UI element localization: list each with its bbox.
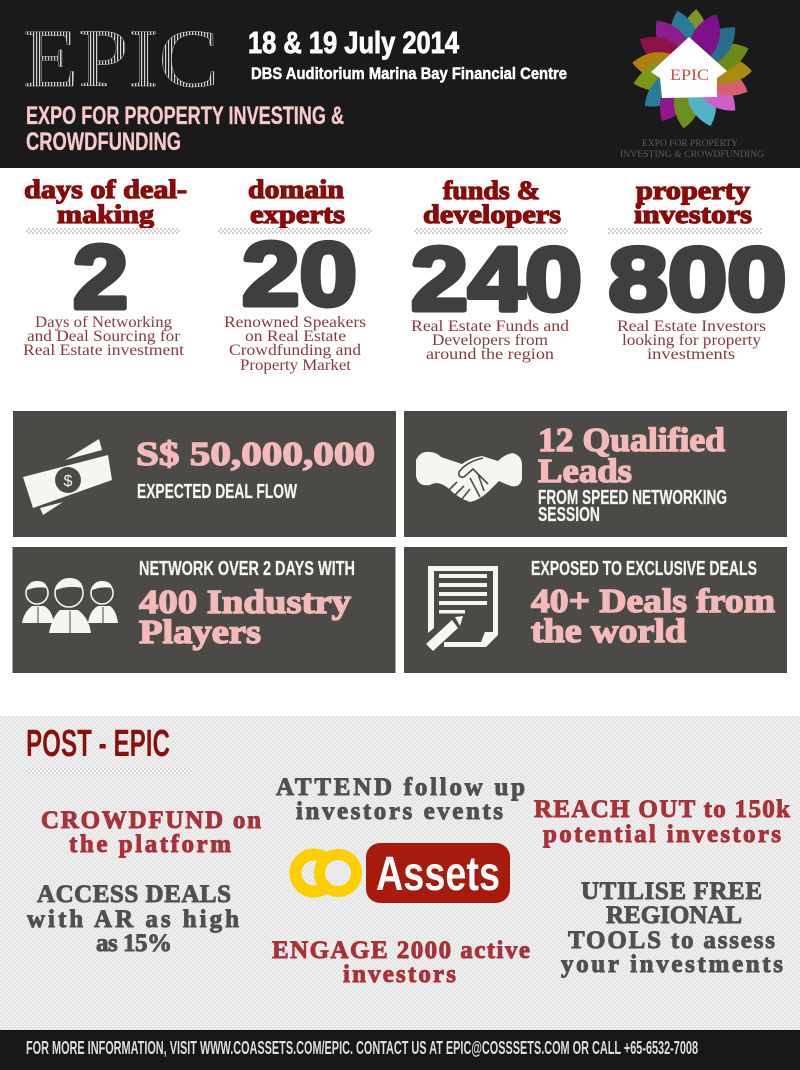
icon: EPIC flower logo: EPIC bbox=[670, 67, 709, 84]
stat: funds & developers: developers bbox=[423, 200, 561, 229]
stat: property investors bbox=[608, 176, 786, 363]
stat: funds & developers bbox=[411, 176, 582, 363]
text: engage: ENGAGE 2000 active bbox=[272, 937, 530, 964]
stat: funds & developers: Developers from bbox=[432, 332, 548, 349]
icon: handshake bbox=[416, 452, 522, 502]
stat: domain experts: Crowdfunding and bbox=[229, 342, 361, 359]
text: reach out: potential investors bbox=[543, 821, 781, 848]
stat: domain experts: 20 bbox=[242, 225, 357, 325]
text: utilise: your investments bbox=[561, 951, 783, 978]
stat: funds & developers: Real Estate Funds and bbox=[411, 318, 569, 335]
subtitle: EXPO FOR PROPERTY INVESTING & bbox=[26, 102, 344, 130]
stat: property investors: investors bbox=[634, 200, 752, 229]
text: attend: ATTEND follow up bbox=[276, 774, 525, 801]
stat: days of deal-making bbox=[23, 175, 187, 359]
text: reach out: REACH OUT to 150k bbox=[534, 796, 790, 823]
title: EPIC striped wordmark: EPIC bbox=[23, 12, 219, 104]
stat: days of deal-making: making bbox=[57, 200, 154, 229]
panel: industry players: 400 Industry bbox=[139, 584, 351, 621]
stat: domain experts: domain bbox=[248, 175, 345, 204]
text: utilise: TOOLS to assess bbox=[568, 927, 775, 954]
header banner bbox=[0, 0, 800, 168]
stat: funds & developers: 240 bbox=[411, 230, 582, 330]
stat: domain experts: experts bbox=[250, 200, 345, 229]
panel: post-epic bbox=[0, 716, 800, 1030]
panel: industry players: NETWORK OVER 2 DAYS WITH bbox=[139, 558, 355, 580]
stat: days of deal-making: 2 bbox=[73, 228, 128, 328]
icon: banknotes bbox=[23, 439, 112, 515]
icon: three people bbox=[22, 578, 118, 633]
text: access deals: with AR as high bbox=[27, 906, 239, 933]
stat: funds & developers: funds & bbox=[443, 176, 540, 205]
icon: EPIC flower logo: EXPO FOR PROPERTY bbox=[642, 139, 738, 149]
icon: EPIC flower logo bbox=[620, 8, 764, 160]
stat: days of deal-making: Days of Networking bbox=[35, 314, 172, 331]
panel: exclusive deals: the world bbox=[531, 613, 686, 650]
stat: funds & developers: around the region bbox=[426, 346, 554, 363]
stat: days of deal-making: Real Estate investment bbox=[23, 342, 185, 359]
text: access deals bbox=[27, 881, 239, 957]
stat: domain experts: Property Market bbox=[240, 357, 352, 374]
stat: domain experts bbox=[218, 175, 372, 374]
text: attend bbox=[276, 774, 525, 825]
panel: qualified leads bbox=[404, 411, 787, 537]
text: access deals: as 15% bbox=[96, 930, 172, 957]
icon: CoAssets logo bbox=[296, 843, 510, 903]
panel: expected deal flow: EXPECTED DEAL FLOW bbox=[137, 481, 297, 503]
panel: industry players bbox=[12, 547, 396, 673]
text: engage bbox=[272, 937, 530, 988]
panel: expected deal flow: S$ 50,000,000 bbox=[136, 436, 375, 473]
text: engage: investors bbox=[343, 961, 456, 988]
stat: domain experts: Renowned Speakers bbox=[224, 314, 366, 331]
panel: expected deal flow bbox=[13, 411, 396, 537]
icon: EPIC flower logo: INVESTING & CROWDFUNDING bbox=[620, 150, 764, 160]
text: attend: investors events bbox=[296, 798, 503, 825]
text: access deals: ACCESS DEALS bbox=[37, 881, 231, 908]
panel: qualified leads: Leads bbox=[538, 453, 632, 490]
panel: exclusive deals: 40+ Deals from bbox=[531, 583, 775, 620]
heading: post-epic: POST - EPIC bbox=[26, 723, 170, 765]
text: utilise bbox=[561, 878, 783, 978]
text: crowdfund: the platform bbox=[69, 831, 231, 858]
text: crowdfund: CROWDFUND on bbox=[41, 807, 261, 834]
stat: property investors: 800 bbox=[608, 230, 786, 330]
stat: property investors: investments bbox=[647, 346, 735, 363]
panel: qualified leads: 12 Qualified bbox=[538, 422, 725, 459]
panel: industry players: Players bbox=[139, 614, 261, 651]
text: reach out bbox=[534, 796, 790, 848]
subtitle: CROWDFUNDING bbox=[26, 128, 181, 156]
icon: banknotes: $ bbox=[64, 473, 73, 490]
panel: exclusive deals bbox=[404, 547, 787, 673]
event date: 18 & 19 July 2014 bbox=[248, 25, 460, 60]
stat: domain experts: on Real Estate bbox=[245, 328, 346, 345]
stat: days of deal-making: days of deal- bbox=[24, 175, 187, 204]
stat: property investors: Real Estate Investors bbox=[617, 318, 766, 335]
icon: CoAssets logo: Assets bbox=[376, 848, 500, 901]
stat: property investors: property bbox=[636, 176, 750, 205]
event venue: DBS Auditorium Marina Bay Financial Centre bbox=[251, 64, 567, 83]
footer bbox=[0, 1030, 800, 1070]
stat: property investors: looking for property bbox=[622, 332, 761, 349]
icon: document and pencil bbox=[426, 566, 498, 651]
text: utilise: REGIONAL bbox=[606, 902, 742, 929]
text: utilise: UTILISE FREE bbox=[581, 878, 762, 905]
panel: qualified leads: SESSION bbox=[538, 504, 600, 526]
text: crowdfund bbox=[41, 807, 261, 858]
stat: days of deal-making: and Deal Sourcing for bbox=[27, 328, 181, 345]
subtitle bbox=[26, 102, 344, 156]
